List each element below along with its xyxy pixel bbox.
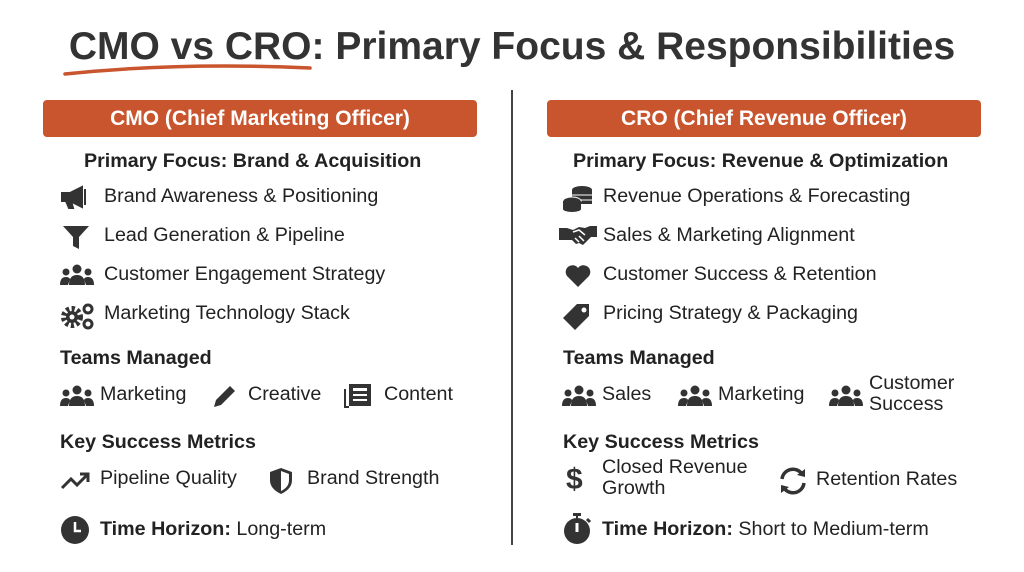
primary focus heading: Primary Focus: Revenue & Optimization xyxy=(573,150,948,172)
teams row xyxy=(60,383,453,408)
item: revops: Revenue Operations & Forecasting xyxy=(603,185,911,207)
item: pricing xyxy=(563,302,858,330)
item: martech: Marketing Technology Stack xyxy=(104,302,350,324)
panel: CMO xyxy=(43,100,477,544)
teams heading: Teams Managed xyxy=(60,347,212,369)
title: CMO vs CRO: Primary Focus & Responsibilities xyxy=(69,25,955,68)
item: alignment: Sales & Marketing Alignment xyxy=(603,224,855,246)
item: customer success: Customer Success & Retention xyxy=(603,263,877,285)
metrics row: Growth xyxy=(602,477,665,499)
header bar CRO xyxy=(547,100,981,137)
metrics row xyxy=(61,467,439,494)
header bar CMO: CMO (Chief Marketing Officer) xyxy=(110,107,410,130)
metrics heading: Key Success Metrics xyxy=(563,431,759,453)
teams row: Creative xyxy=(248,383,321,405)
panel: CRO xyxy=(547,100,981,544)
teams row xyxy=(562,372,954,415)
teams heading: Teams Managed xyxy=(563,347,715,369)
header bar CMO xyxy=(43,100,477,137)
time horizon: Time Horizon: Short to Medium-term xyxy=(602,518,929,540)
teams row: Sales xyxy=(602,383,651,405)
header bar CRO: CRO (Chief Revenue Officer) xyxy=(621,107,907,130)
metrics row: Pipeline Quality xyxy=(100,467,237,489)
item: pricing: Pricing Strategy & Packaging xyxy=(603,302,858,324)
metrics row: $ xyxy=(566,463,583,496)
teams row: Success xyxy=(869,393,943,415)
teams row: Marketing xyxy=(718,383,804,405)
item: martech xyxy=(61,302,350,330)
time horizon: Time Horizon: Long-term xyxy=(100,518,326,540)
metrics row: Brand Strength xyxy=(307,467,439,489)
title underline xyxy=(63,64,312,76)
primary focus heading: Primary Focus: Brand & Acquisition xyxy=(84,150,421,172)
item: customer engagement: Customer Engagement Strategy xyxy=(104,263,385,285)
metrics row xyxy=(566,456,957,499)
teams row: Customer xyxy=(869,372,954,394)
time horizon xyxy=(564,513,929,544)
teams row: Marketing xyxy=(100,383,186,405)
teams row: Content xyxy=(384,383,453,405)
metrics heading: Key Success Metrics xyxy=(60,431,256,453)
time horizon xyxy=(61,516,326,544)
metrics row: Retention Rates xyxy=(816,468,957,490)
metrics row: Closed Revenue xyxy=(602,456,748,478)
item: brand awareness: Brand Awareness & Positioning xyxy=(104,185,378,207)
item: lead gen: Lead Generation & Pipeline xyxy=(104,224,345,246)
